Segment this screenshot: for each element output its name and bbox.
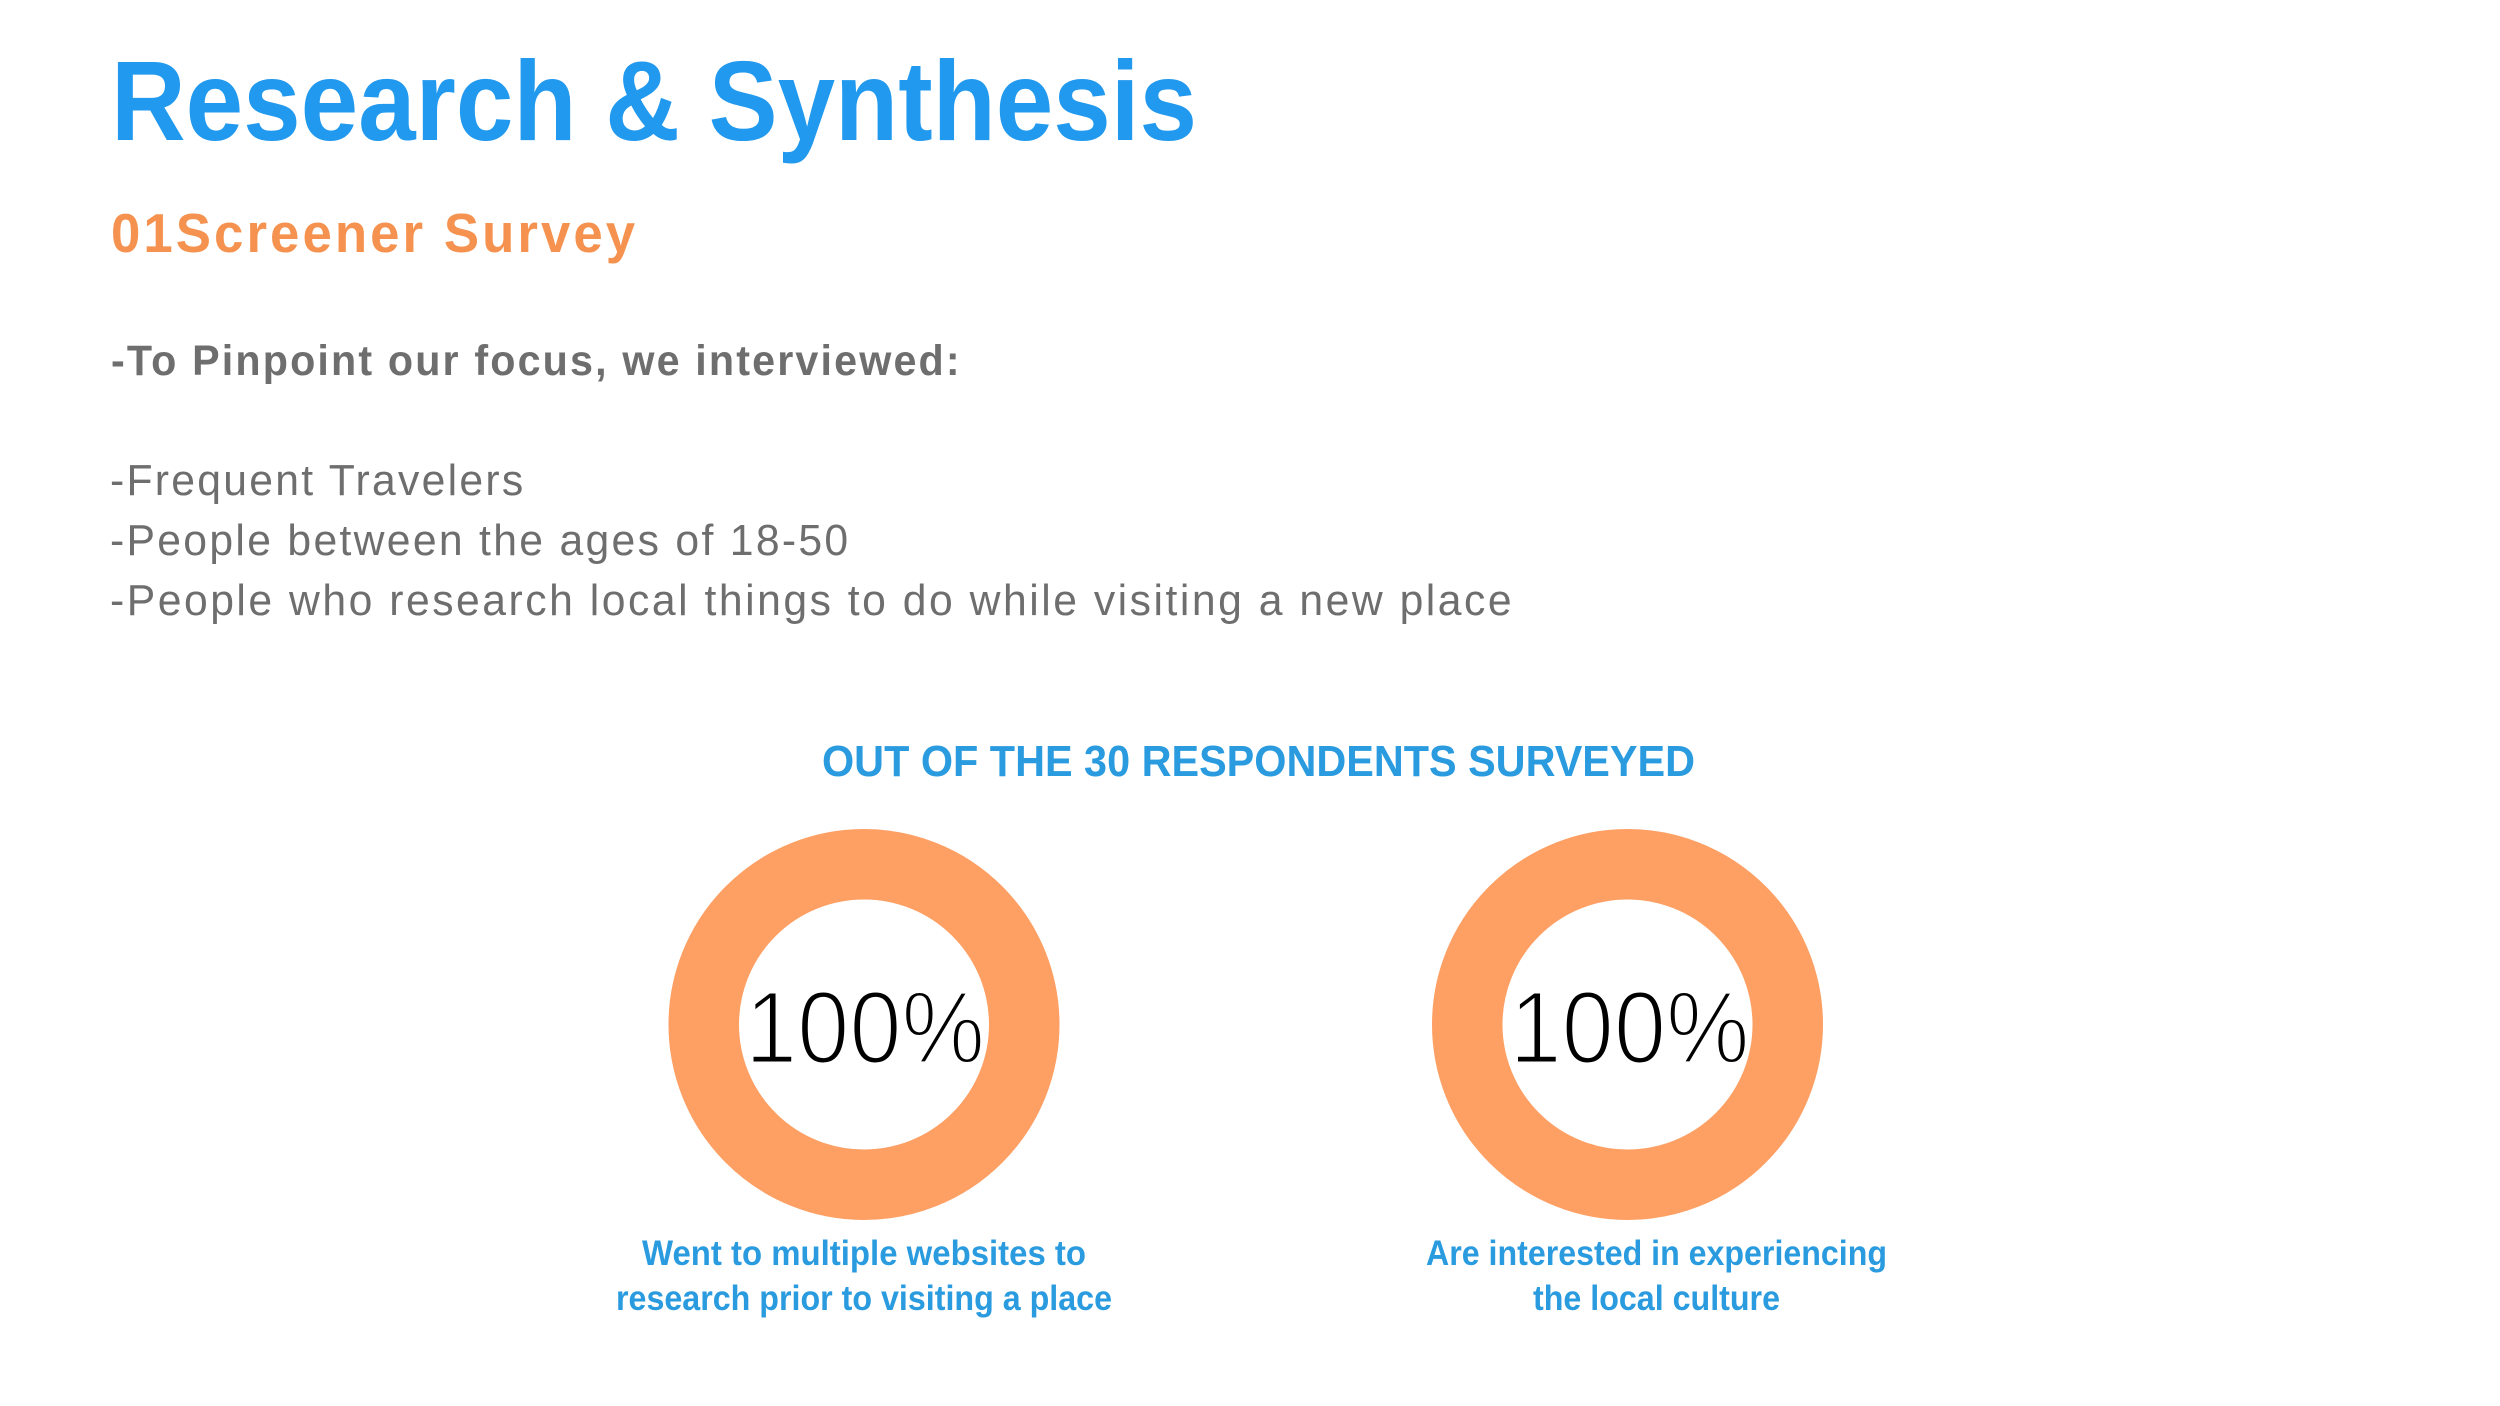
subtitle: screener survey: 01Screener Survey bbox=[111, 203, 635, 264]
panel: left donut stat bbox=[616, 864, 1112, 1318]
criterion: age range: -People between the ages of 18-50 bbox=[110, 516, 848, 565]
caption bbox=[616, 1234, 1112, 1318]
lead-in sentence: -To Pinpoint our focus, we interviewed: bbox=[111, 336, 960, 384]
title: Research & Synthesis bbox=[111, 38, 1197, 164]
criterion: frequent travelers: -Frequent Travelers bbox=[110, 456, 523, 505]
panel: right donut stat bbox=[1426, 864, 1887, 1318]
criterion: local research: -People who research local things to do while visiting a new place bbox=[110, 576, 1512, 625]
donut chart: 100 percent bbox=[1467, 864, 1788, 1185]
section heading: respondents: OUT OF THE 30 RESPONDENTS SURVEYED bbox=[822, 737, 1695, 786]
stat value: 100% bbox=[1510, 970, 1750, 1085]
caption bbox=[1426, 1234, 1887, 1318]
donut chart: 100 percent bbox=[704, 864, 1024, 1185]
caption line 1: Are interested in experiencing bbox=[1426, 1234, 1887, 1273]
stat value: 100% bbox=[745, 970, 985, 1085]
caption line 2: the local culture bbox=[1533, 1279, 1780, 1318]
caption line 1: Went to multiple websites to bbox=[642, 1234, 1086, 1273]
caption line 2: research prior to visiting a place bbox=[616, 1279, 1112, 1318]
text block: interview criteria bbox=[110, 336, 1512, 625]
